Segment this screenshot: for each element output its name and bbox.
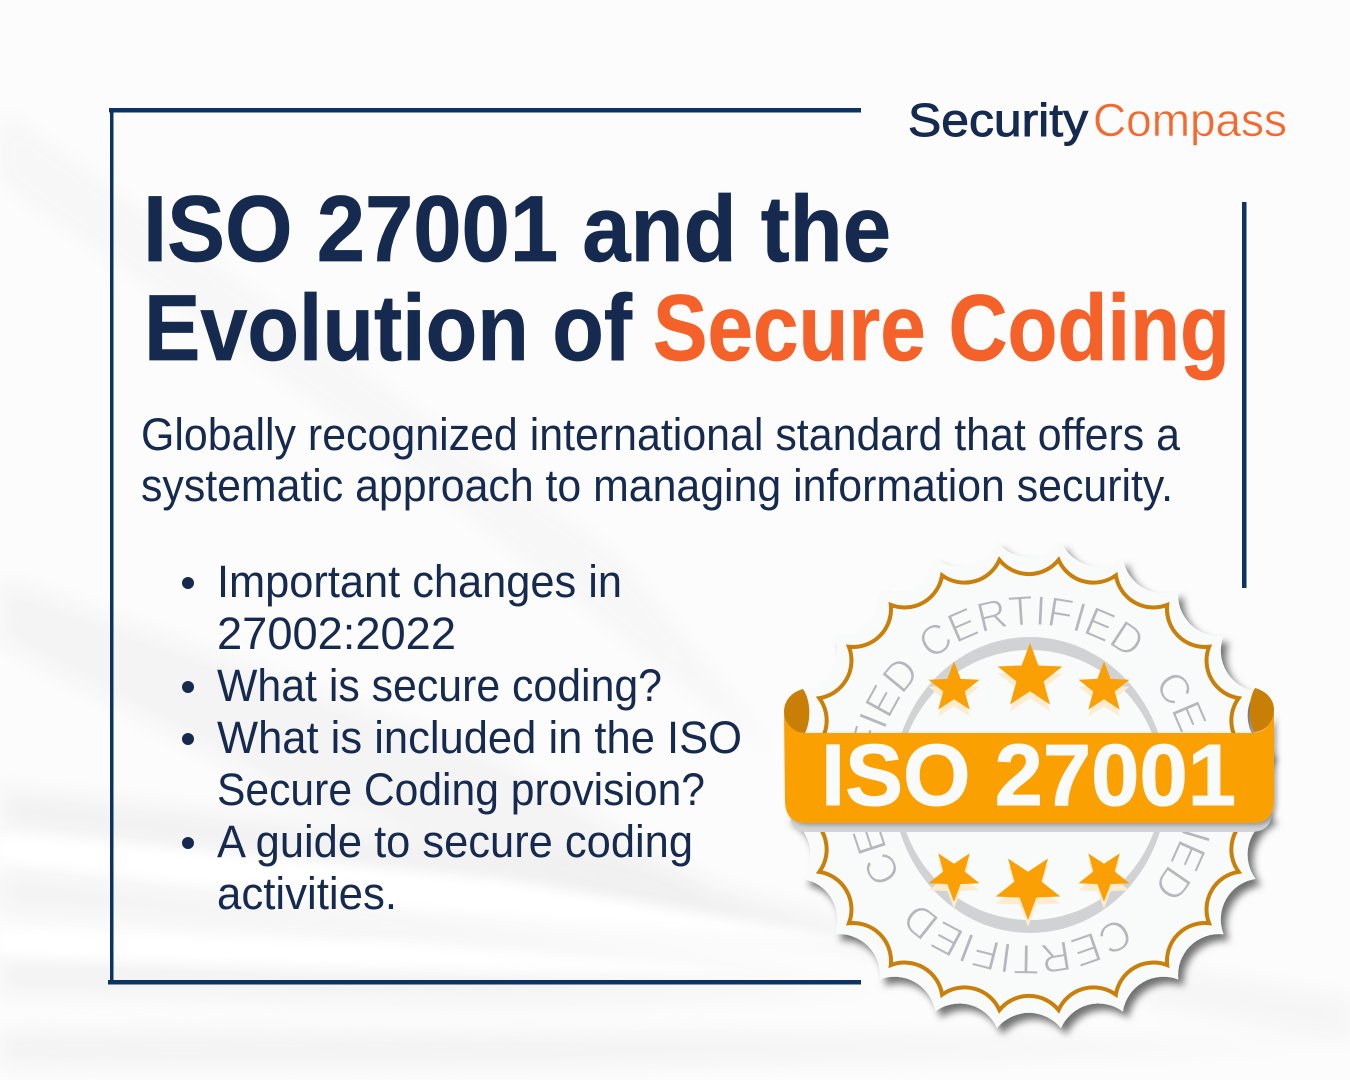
title xyxy=(143,176,1230,380)
badge: grey inner ring xyxy=(893,637,1167,933)
intro paragraph: systematic approach to managing information security. xyxy=(141,460,1173,511)
ribbon: left curl xyxy=(784,689,809,733)
bullet list: Important changes in xyxy=(217,556,622,607)
icon: ISO 27001 certified badge xyxy=(784,546,1281,1038)
badge: curved CERTIFIED text ring: CERTIFIED xyxy=(907,908,1128,974)
title: Evolution of xyxy=(144,275,633,380)
title: ISO 27001 and the xyxy=(143,176,891,281)
title: Secure Coding xyxy=(653,275,1230,380)
badge: white scalloped seal xyxy=(786,542,1272,1028)
bullet list: activities. xyxy=(217,868,397,919)
bullet list: What is included in the ISO xyxy=(217,712,742,763)
intro paragraph: Globally recognized international standard that offers a xyxy=(141,409,1181,460)
ribbon: orange banner xyxy=(784,710,1274,823)
bullet list: What is secure coding? xyxy=(217,660,662,711)
frame: top, left and bottom rules xyxy=(108,108,1246,984)
stars: bottom row xyxy=(929,853,1129,927)
ribbon: grey drop band xyxy=(790,790,1272,832)
logo: Security Compass: Compass xyxy=(1093,94,1287,146)
bullet list xyxy=(182,556,742,919)
logo: Security Compass xyxy=(908,94,1287,146)
bullet list: Secure Coding provision? xyxy=(217,764,705,815)
badge: curved CERTIFIED text ring: CERTIFIED xyxy=(922,596,1140,654)
ribbon: right curl xyxy=(1250,688,1274,732)
bullet list: 27002:2022 xyxy=(217,608,456,659)
badge: curved CERTIFIED text ring: CERTIFIED xyxy=(852,661,914,882)
badge: curved CERTIFIED text ring: CERTIFIED xyxy=(1159,674,1210,898)
bullet list: A guide to secure coding xyxy=(217,816,693,867)
logo: Security Compass: Security xyxy=(908,94,1088,146)
ribbon label: ISO 27001: ISO 27001 xyxy=(821,727,1236,824)
badge: gold scalloped outline xyxy=(804,560,1254,1010)
stars: top row xyxy=(929,643,1129,717)
intro paragraph xyxy=(141,409,1181,511)
badge: curved CERTIFIED text ring xyxy=(786,596,1268,974)
